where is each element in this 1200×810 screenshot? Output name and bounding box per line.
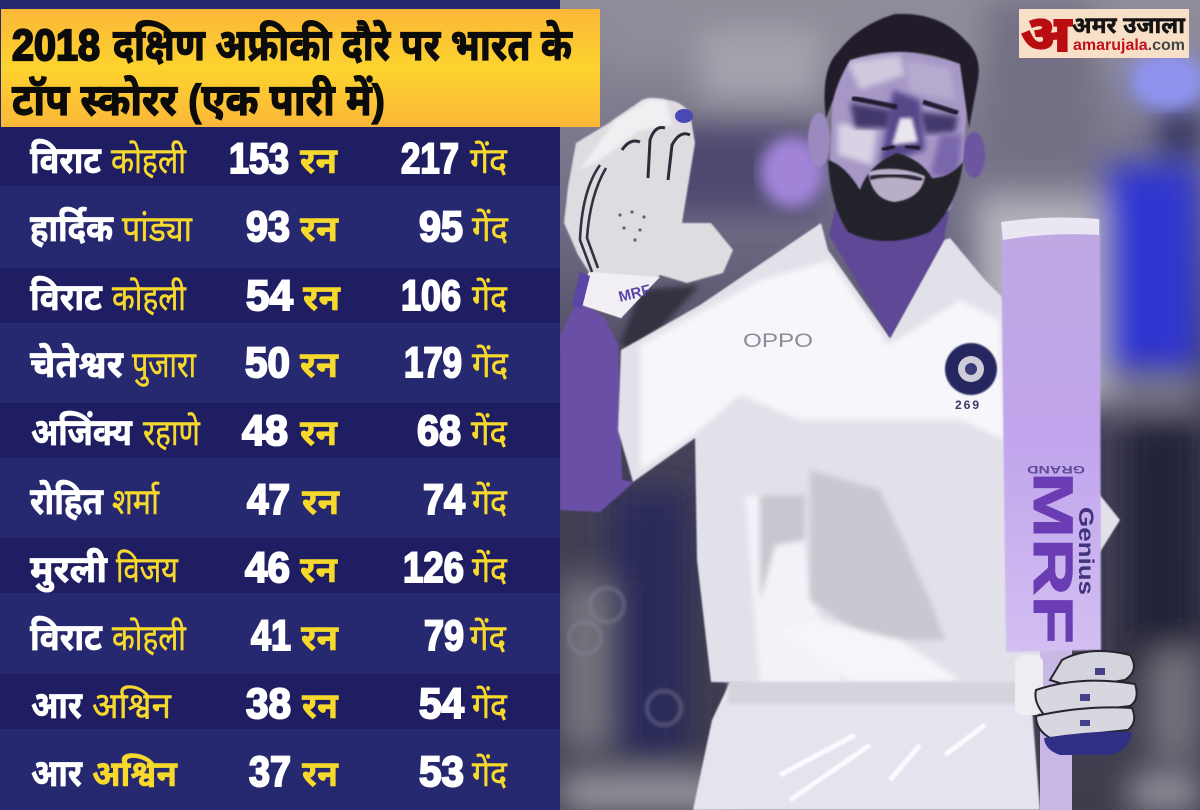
panel background [0,0,560,810]
row 7: Murali Vijay 46: 126 [403,544,464,592]
blurred purple spot [760,136,824,208]
hair [824,14,979,128]
row 8: Virat Kohli 41: गेंद [470,617,507,658]
row 10: R Ashwin 37: अश्विन [92,753,178,794]
row 8: Virat Kohli 41: कोहली [112,617,187,658]
panel: scorers table [0,0,560,810]
row 10: R Ashwin 37: आर [31,753,83,795]
row 6: Rohit Sharma 47: 74 [423,476,465,524]
row 7: Murali Vijay 46: विजय [116,549,179,590]
row 6: Rohit Sharma 47: रोहित [30,479,104,523]
row 2: Hardik Pandya 93: गेंद [472,208,509,249]
row 5: Ajinkya Rahane 48: रहाणे [143,412,201,453]
row 7: Murali Vijay 46: मुरली [30,547,108,593]
left glove raised: MRF [617,282,653,306]
logo url: amarujala.com [1073,37,1185,54]
row 3: Virat Kohli 54: कोहली [112,277,187,318]
shirt shading [640,260,1005,700]
row 4: Cheteshwar Pujara 50: पुजारा [132,344,197,387]
row 2: Hardik Pandya 93: रन [300,208,339,249]
row 8: Virat Kohli 41: विराट [30,615,102,659]
logo wordmark: अमर उजाला [1072,12,1186,38]
row 3: Virat Kohli 54 [30,272,508,320]
nose [892,118,918,145]
row 10: R Ashwin 37 [31,748,508,796]
row 5: Ajinkya Rahane 48: रन [300,412,338,453]
bat sub-brand text: Grand Edition: GRAND [1027,463,1085,475]
title line 2: टॉप स्कोरर (एक पारी में) [12,75,385,125]
bat handle [1040,640,1072,810]
row 7: Murali Vijay 46: रन [300,549,338,590]
row 1: Virat Kohli 153: 217 [401,135,459,183]
lower glove gripping bat [1015,651,1137,755]
dark shadow behind wrist [620,285,700,350]
row 9: R Ashwin 38: 38 [246,680,291,728]
row 5: Ajinkya Rahane 48: 48 [242,407,288,455]
row 5: Ajinkya Rahane 48 [31,407,508,455]
row 3: Virat Kohli 54: गेंद [472,277,508,318]
beard [828,153,963,241]
row 4: Cheteshwar Pujara 50: रन [300,344,339,385]
raised forearm [560,300,634,512]
row 2: Hardik Pandya 93: 93 [246,203,290,251]
photo: batsman raising glove and bat [560,0,1200,810]
shirt torso and sleeve [618,223,1120,690]
row 7: Murali Vijay 46: गेंद [472,549,508,590]
row 2: Hardik Pandya 93: 95 [419,203,463,251]
row 8: Virat Kohli 41: रन [301,617,339,658]
team crest [945,343,997,412]
neck [829,205,950,338]
row 9: R Ashwin 38: रन [302,685,339,726]
row 9: R Ashwin 38: गेंद [472,685,508,726]
bokeh circles [569,588,681,725]
row 1: Virat Kohli 153: रन [300,140,338,181]
row 1: Virat Kohli 153: विराट [30,138,101,182]
title banner [1,9,600,127]
row 6: Rohit Sharma 47: गेंद [472,481,508,522]
row 2: Hardik Pandya 93: हार्दिक [30,206,114,250]
photo background: blurred stadium [560,0,1200,810]
face highlights and shadows [838,55,962,180]
row 4: Cheteshwar Pujara 50: गेंद [472,344,509,385]
row 1: Virat Kohli 153 [30,135,508,183]
head [808,14,985,241]
row 4: Cheteshwar Pujara 50: 50 [245,339,290,387]
row 4: Cheteshwar Pujara 50: 179 [404,339,462,387]
trousers [693,682,1040,810]
row 5: Ajinkya Rahane 48: अजिंक्य [31,410,133,454]
row 3: Virat Kohli 54: रन [303,277,341,318]
row 9: R Ashwin 38: 54 [419,680,464,728]
row 9: R Ashwin 38 [31,680,508,728]
row 6: Rohit Sharma 47 [30,476,508,524]
row 7: Murali Vijay 46 [30,544,508,593]
row 9: R Ashwin 38: अश्विन [92,685,172,726]
row 6: Rohit Sharma 47: शर्मा [112,481,160,522]
ears [808,113,830,167]
mouth and chin patch [868,169,925,202]
row 3: Virat Kohli 54: 106 [401,272,461,320]
row 4: Cheteshwar Pujara 50 [30,339,509,387]
bat brand text: MRF: MRF [1022,472,1085,644]
face [830,50,967,232]
row 5: Ajinkya Rahane 48: 68 [417,407,461,455]
row 8: Virat Kohli 41: 79 [424,612,464,660]
row 10: R Ashwin 37: 37 [249,748,291,796]
row 2: Hardik Pandya 93 [30,203,509,251]
row 9: R Ashwin 38: आर [31,685,83,727]
title year: 2018 [12,21,100,70]
palm perforations [618,210,646,242]
row 3: Virat Kohli 54: 54 [246,272,293,320]
bat [1001,218,1101,652]
team crest: 269 [955,398,979,412]
row 7: Murali Vijay 46: 46 [245,544,290,592]
row 1: Virat Kohli 153: गेंद [470,140,508,181]
left glove raised [564,98,733,318]
logo mark: अ [1021,6,1073,62]
brows [852,98,958,113]
row 10: R Ashwin 37: 53 [419,748,464,796]
row 6: Rohit Sharma 47: 47 [247,476,290,524]
logo: Amar Ujala [1019,6,1189,62]
trouser folds [780,725,985,800]
row 3: Virat Kohli 54: विराट [30,275,102,319]
trouser waistband [728,682,1033,704]
blurred blue figure highlight [1134,56,1200,108]
row 8: Virat Kohli 41: 41 [251,612,291,660]
row 4: Cheteshwar Pujara 50: चेतेश्वर [30,342,124,386]
row 10: R Ashwin 37: रन [302,753,339,794]
sponsor logo on shirt: OPPO [743,331,813,352]
row 2: Hardik Pandya 93: पांड्या [122,208,193,249]
row 10: R Ashwin 37: गेंद [472,753,508,794]
row 8: Virat Kohli 41 [30,612,507,660]
row 6: Rohit Sharma 47: रन [302,481,340,522]
title line 1: दक्षिण अफ्रीकी दौरे पर भारत के [113,19,573,70]
row 1: Virat Kohli 153: कोहली [111,140,187,181]
row 5: Ajinkya Rahane 48: गेंद [471,412,508,453]
bat model text: Genius: Genius [1074,507,1097,595]
row 1: Virat Kohli 153: 153 [229,135,289,183]
